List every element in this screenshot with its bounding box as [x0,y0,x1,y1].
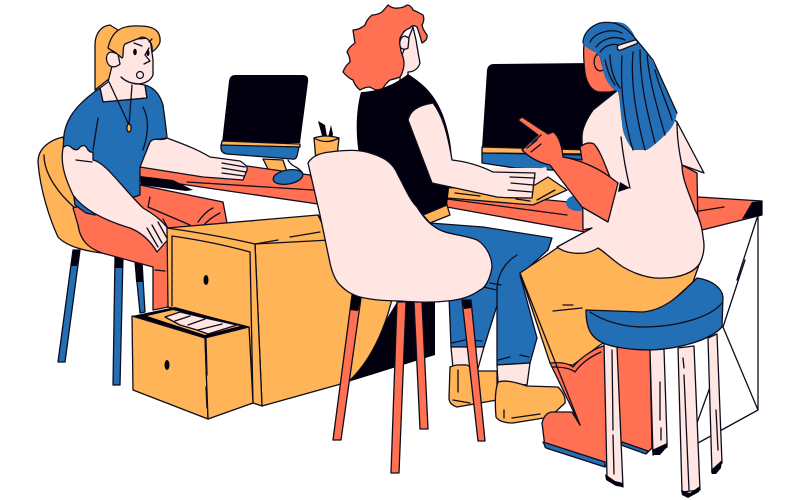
jeans upper and front leg [421,223,552,365]
cabinet front [167,228,262,406]
black top [357,74,452,215]
back leg and lap [73,185,227,310]
desk left section [139,166,320,204]
cabinet top [167,215,330,244]
shell [308,150,492,302]
filing cabinet [132,215,435,419]
seat [586,278,723,350]
face details [134,39,152,64]
sock front [497,363,530,385]
necklace [109,82,132,125]
arm [408,103,535,198]
hair clip [617,40,637,50]
left chair [38,137,145,385]
neck and face [400,27,420,82]
sock back [451,347,484,372]
back jeans leg [449,280,505,347]
legs [650,349,667,455]
yellow belt [423,205,450,223]
person left [62,25,247,310]
front chair [308,150,492,473]
sleeve shadow [618,182,630,192]
neck and face [100,38,153,102]
desk wire frame [697,215,758,443]
open drawer [132,307,249,338]
ear [106,52,120,67]
person right [518,22,704,467]
paper under hand [493,168,540,180]
back arm [680,165,698,230]
ear [400,36,409,49]
person middle [343,5,565,423]
arm on desk [140,138,247,180]
legs [414,302,428,429]
desk right section [445,190,762,232]
stool [586,278,723,498]
front arm and hand [518,117,618,222]
shadow [348,302,435,382]
shirt [557,90,704,278]
shoe front [495,381,565,423]
boot [542,346,652,467]
pen cup [314,121,339,161]
shirt [63,85,167,215]
cabinet side [255,215,393,406]
monitor right [482,63,625,172]
monitor left [221,75,308,176]
shoe back [449,365,497,407]
arm on thigh [62,146,172,252]
braids [583,22,677,150]
hair front [108,26,160,58]
ear [594,54,604,71]
curly hair [343,5,427,90]
keyboard [443,167,590,211]
braid lines [583,22,677,150]
yellow trousers [520,248,700,365]
ponytail [95,25,118,90]
face [584,43,618,92]
